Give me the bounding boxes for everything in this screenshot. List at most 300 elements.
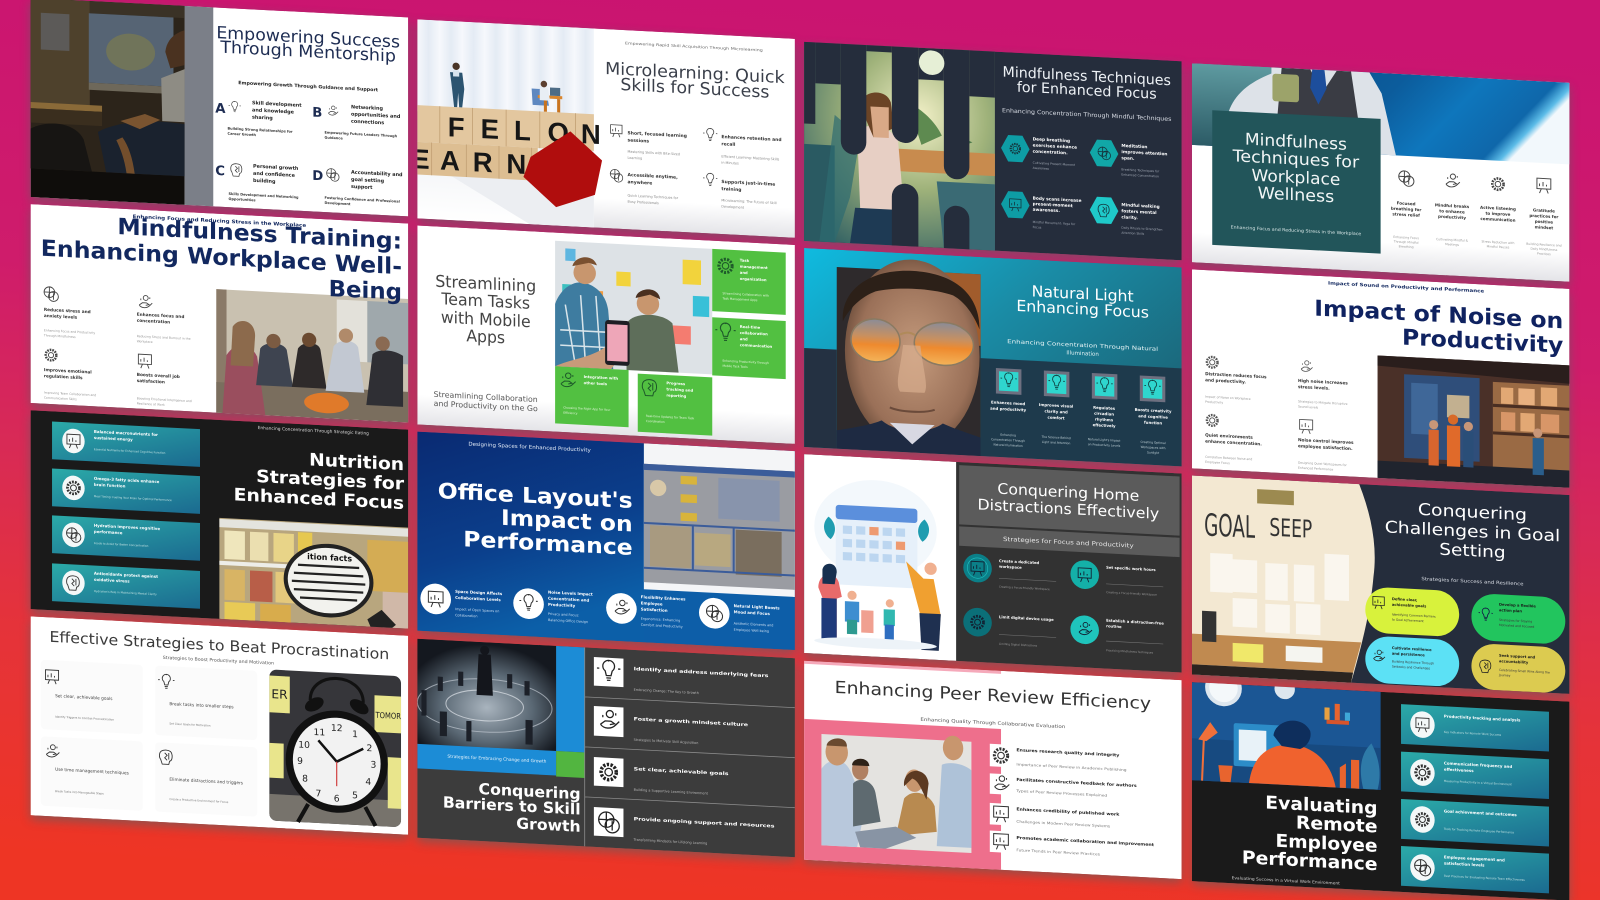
box texts: tracking and (666, 387, 693, 393)
subtitle: and Productivity on the Go (434, 399, 538, 413)
items (1205, 355, 1354, 473)
photo: wooden letter blocks: E (481, 113, 499, 145)
title: Enhanced Focus (234, 485, 404, 514)
metric blocks: Employee engagement and (1444, 854, 1505, 863)
item 4 (1090, 196, 1163, 237)
rows: Promotes academic collaboration and improvement (1016, 835, 1154, 847)
title block: Conquering Home (997, 481, 1139, 505)
four columns: comfort (1048, 415, 1065, 421)
box texts: Choosing the Right App for Your (563, 406, 611, 412)
items: Set clear, achievable goals (55, 693, 113, 702)
kicker: Impact of Sound on Productivity and Performance (1328, 281, 1484, 295)
four pills (1365, 586, 1565, 694)
item 3: Mindful Movement: Yoga for (1033, 220, 1076, 226)
four columns: on Productivity Levels (1088, 442, 1121, 448)
four columns: Concentration Through (991, 437, 1025, 443)
subtitle: Enhancing Concentration Through Mindful Techniques (1002, 108, 1171, 123)
photo: goal whiteboard (1192, 476, 1375, 684)
title (1314, 297, 1563, 359)
four teal blocks: Meal Timing: Fueling Your Brain for Optimal Performance (94, 494, 172, 502)
items: Accessible anytime, (628, 172, 678, 181)
four columns: Natural Illumination (994, 442, 1023, 448)
four columns: communication (1480, 216, 1516, 223)
item D: support (351, 184, 373, 191)
box texts: other tools (584, 381, 608, 386)
title panel: Enhancing Focus and Reducing Stress in the Workplace (1231, 225, 1362, 237)
items: Learning (628, 156, 642, 161)
four columns (1391, 170, 1562, 257)
four pills: achievable goals (1392, 603, 1426, 608)
item D: Accountability and (351, 170, 403, 178)
kicker: Empowering Rapid Skill Acquisition Through Microlearning (625, 41, 763, 52)
four bottom features: Privacy and Focus: (548, 612, 579, 618)
photo: team around laptop (821, 729, 971, 853)
right rows: Provide ongoing support and resources (634, 816, 775, 830)
items: and productivity. (1205, 377, 1246, 385)
title: Productivity (1402, 326, 1563, 359)
illustration: remote worker (1192, 668, 1381, 790)
title: Effective Strategies to Beat Procrastination (49, 629, 389, 663)
four columns: The Science Behind (1041, 435, 1071, 440)
four pills: Setbacks and Challenges (1392, 664, 1431, 670)
item 1: Deep breathing (1033, 136, 1070, 144)
four columns: Meetings (1445, 242, 1459, 247)
title: Being (329, 276, 402, 306)
title: Remote (1296, 812, 1378, 838)
photo: business figures on disc (417, 639, 556, 751)
four teal blocks: Balanced macronutrients for (94, 429, 158, 437)
four bottom features: Comfort and Productivity (641, 623, 683, 629)
four columns: rhythms (1095, 416, 1114, 422)
items: Boosts overall job (137, 372, 180, 380)
items: High noise increases (1298, 378, 1348, 387)
items: Improving Team Collaboration and (44, 391, 96, 397)
title: Office Layout's (438, 479, 633, 514)
item A: Building Strong Relationships for (228, 127, 293, 134)
title: Barriers to Skill (443, 793, 581, 819)
four columns: effectively (1093, 422, 1116, 428)
four bottom features: Balancing Office Design (548, 618, 588, 624)
subtitle: Illumination (1066, 350, 1099, 358)
four pills: and persistence (1392, 652, 1425, 657)
subtitle band: Strategies for Focus and Productivity (1003, 537, 1134, 550)
four columns: Stress Reduction with (1481, 239, 1515, 245)
four columns: Enhancing (1000, 433, 1016, 437)
item A: A (215, 102, 226, 117)
panel: Conquering Home Distractions (804, 454, 1182, 673)
four pills: Motivated and Focused (1499, 623, 1534, 629)
item B: connections (351, 119, 384, 126)
photo: wooden letter blocks: O (547, 116, 569, 148)
photo: alarm clock: 4 (365, 777, 371, 788)
items: Through Mindfulness (43, 333, 76, 339)
four pills: Cultivate resilience (1392, 646, 1432, 652)
item 1: Cultivating Present-Moment (1033, 161, 1076, 167)
panel: Microlearning (411, 19, 795, 238)
photo: alarm clock: 1 (352, 729, 358, 740)
photo: alarm clock: 3 (371, 760, 377, 771)
photo: alarm clock: 5 (352, 790, 358, 802)
photo: team with phone (555, 241, 712, 374)
title: Apps (466, 326, 505, 347)
item 1: Awareness (1033, 166, 1049, 171)
metric blocks: Key Indicators for Remote Work Success (1444, 730, 1502, 737)
items: Mastering Skills with Bite-Sized (628, 150, 680, 156)
photo: wooden letter blocks: R (473, 146, 493, 178)
metric blocks (1401, 704, 1549, 893)
four columns: Creating Optimal (1140, 440, 1166, 445)
item D: Fostering Confidence and Professional (324, 196, 400, 204)
four columns: function (1144, 420, 1162, 426)
four teal blocks: Antioxidants protect against (94, 571, 158, 579)
rows: Ensures research quality and integrity (1016, 747, 1120, 758)
item C: Skills Development and Networking (229, 192, 299, 200)
rows: Types of Peer Review Processes Explained (1015, 789, 1107, 798)
four columns: Cultivating Mindful & (1436, 237, 1469, 243)
item A: sharing (252, 115, 273, 122)
four bottom features: Collaboration Levels (455, 595, 501, 602)
photo: alarm clock: TOMOR (375, 710, 401, 721)
title (1004, 66, 1170, 99)
items: employee satisfaction. (1298, 443, 1353, 452)
metric blocks: Best Practices for Evaluating Remote Team Effectiveness (1444, 874, 1525, 882)
four teal blocks: Essential Nutrients for Enhanced Cognitive Function (94, 447, 166, 455)
title (218, 26, 400, 65)
item B: Empowering Future Leaders Through (324, 131, 398, 138)
rows: Enhances credibility of published work (1016, 806, 1120, 817)
four pills: Identifying Common Barriers (1392, 612, 1436, 619)
items: training (721, 186, 741, 193)
item C: C (215, 164, 225, 179)
four bottom features: Employee (641, 600, 663, 607)
four bottom features: Impact of Open Spaces on (455, 607, 499, 613)
photo: warehouse team (1378, 355, 1569, 488)
four pills: Celebrating Small Wins Along the (1499, 668, 1550, 675)
four pills: Building Resilience Through (1392, 659, 1434, 666)
metric blocks: satisfaction levels (1444, 861, 1485, 868)
title (438, 479, 633, 561)
title (1016, 282, 1149, 322)
four teal blocks: Hydration's Role in Maintaining Mental Clarity (94, 589, 157, 596)
right rows: Transforming Mindsets for Lifelong Learning (633, 838, 707, 846)
photo: nutrition label under magnifier: ition facts (307, 551, 352, 563)
item B: B (312, 106, 322, 121)
four columns: circadian (1094, 411, 1114, 417)
four columns: mindset (1535, 224, 1553, 230)
items: sessions (628, 137, 649, 145)
photo: woman at desk behind pill cutouts (804, 42, 995, 251)
items: Creating a Focus-Friendly Workspace (999, 585, 1050, 591)
rows (990, 744, 1154, 860)
title: Through Mentorship (219, 37, 396, 66)
metric blocks: Productivity tracking and analysis (1444, 714, 1521, 723)
title panel: Wellness (1258, 183, 1334, 206)
four columns (990, 368, 1172, 456)
title: for Enhanced Focus (1017, 80, 1157, 103)
items: Set Clear Goals for Motivation (169, 721, 211, 728)
panel: Natural Light Enhancing Focus (804, 248, 1182, 466)
photo: alarm clock: ER (271, 687, 288, 702)
kicker: Enhancing Concentration Through Strategic Eating (258, 425, 369, 437)
panel: Conquering Barriers to Skill Growth (417, 639, 795, 857)
right rows: Embracing Change: The Key to Growth (634, 688, 699, 695)
item D: Development (324, 201, 351, 206)
items: in Minutes (721, 161, 739, 166)
items: Create a Productive Environment for Focus (169, 797, 229, 804)
four columns: productivity (1438, 214, 1466, 220)
photo: alarm clock: 9 (297, 756, 303, 767)
title (41, 210, 402, 306)
rows: Challenges in Modern Peer Review Systems (1016, 820, 1110, 829)
items: Sound Levels (1298, 405, 1319, 410)
title: Performance (1242, 847, 1378, 875)
items: Limit digital device usage (999, 615, 1054, 622)
item 3: present-moment (1033, 201, 1073, 209)
blue and green blocks (417, 639, 585, 778)
photo: wooden letter blocks: L (514, 115, 531, 147)
subtitle: Evaluating Success in a Virtual Work Environment (1232, 875, 1340, 886)
items: Productivity (1205, 400, 1223, 405)
box texts: and (740, 271, 748, 275)
four teal blocks: brain function (94, 482, 126, 489)
kicker: Enhancing Focus and Reducing Stress in the Workplace (133, 214, 307, 229)
pink panel (804, 719, 1001, 870)
four bottom features: Concentration and (548, 596, 589, 603)
item B: opportunities and (351, 111, 401, 120)
box texts: Coordination (646, 419, 665, 424)
photo: alarm clock: 10 (298, 739, 310, 751)
four columns: Natural Light's Impact (1088, 437, 1121, 443)
item 1 (1001, 135, 1077, 172)
photo: alarm clock: 2 (366, 743, 372, 754)
subtitle (1007, 339, 1159, 361)
kicker: Designing Spaces for Enhanced Productivity (468, 441, 591, 454)
title panel: Techniques for (1232, 146, 1359, 172)
subtitle band (959, 526, 1180, 557)
four columns: Light and Attention (1042, 440, 1070, 445)
photo: alarm clock: 6 (334, 793, 340, 805)
pill cutouts (804, 42, 995, 250)
four columns: practices for (1529, 213, 1558, 219)
items: Enhances focus and (137, 312, 184, 320)
box texts: communication (740, 343, 773, 349)
four bottom features: Aesthetic Elements and (734, 621, 773, 628)
right rows: Building a Supportive Learning Environment (634, 788, 709, 796)
red heptagon (523, 129, 602, 210)
item 3: Focus (1033, 225, 1042, 230)
items (963, 553, 1164, 655)
four bottom features: Ergonomics: Enhancing (641, 617, 680, 623)
title: Empowering Success (216, 22, 400, 52)
four pills: action plan (1499, 608, 1522, 613)
title (606, 62, 784, 98)
photo: goal whiteboard: GOAL (1204, 508, 1255, 546)
four columns: breathing for (1391, 206, 1421, 212)
four columns: Practices (1537, 252, 1551, 256)
item 3: awareness. (1033, 207, 1060, 214)
four columns: Gratitude (1533, 207, 1555, 214)
right rows: Identify and address underlying fears (634, 666, 769, 679)
subtitle: Strategies for Success and Resilience (1421, 576, 1524, 587)
items: Impact of Noise on Workplace (1205, 395, 1251, 401)
item D: D (312, 169, 323, 184)
box texts: Task Management Apps (721, 296, 758, 302)
right rows (585, 647, 795, 857)
items: stress levels. (1298, 384, 1330, 392)
items: Busy Professionals (628, 200, 659, 205)
panel: Office Layout (417, 432, 795, 650)
subtitle: Empowering Growth Through Guidance and Support (238, 80, 379, 93)
items (43, 287, 192, 408)
four columns: Mindful breaks (1435, 202, 1470, 209)
items: Quiet environments (1205, 432, 1253, 441)
four columns: Mindful Pauses (1487, 244, 1510, 250)
items: concentration (137, 318, 170, 326)
item 2: Breathing Techniques for (1121, 167, 1160, 173)
subtitle: Streamlining Collaboration (434, 390, 538, 404)
box texts: and (740, 337, 748, 341)
four columns: to improve (1485, 211, 1511, 217)
items: Noise control improves (1298, 437, 1354, 446)
photo: wooden letter blocks: F (448, 111, 465, 143)
photo: wooden letter blocks: N (581, 118, 601, 150)
title: Enhancing Workplace Well- (41, 236, 402, 280)
box texts: reporting (666, 393, 687, 399)
four columns: Enhancing Focus (1393, 235, 1419, 240)
items: Establish a distraction-free (1106, 619, 1164, 626)
items: routine (1106, 624, 1122, 629)
metric blocks: Goal achievement and outcomes (1444, 808, 1517, 817)
rows: Importance of Peer Review in Academic Publishing (1016, 763, 1127, 772)
four columns: Regulates (1093, 405, 1116, 411)
items: Set specific work hours (1106, 566, 1156, 572)
items: Employee Focus (1205, 460, 1230, 465)
four teal blocks (52, 422, 200, 609)
items: Workplace (137, 339, 153, 344)
subtitle (434, 391, 538, 412)
four bottom features: Satisfaction (641, 606, 668, 613)
panel: Mindfulness Training (31, 204, 408, 423)
four bottom features: Employee Well-being (734, 628, 769, 633)
title: Streamlining (435, 272, 536, 296)
item 3: Body scans increase (1033, 196, 1082, 204)
four bottom features: Natural Light Boosts (734, 603, 780, 611)
four columns: Building Resilience and (1526, 242, 1562, 248)
items: Break tasks into smaller steps (169, 701, 234, 710)
items: Limiting Digital Distractions (999, 642, 1038, 648)
item 2: Enhanced Concentration (1121, 173, 1159, 178)
title: Growth (516, 815, 581, 836)
box texts: Mobile Task Tools (722, 364, 748, 369)
photo: wooden letter blocks: N (506, 148, 526, 180)
metric blocks: effectiveness (1444, 767, 1474, 773)
title (234, 446, 405, 514)
items (610, 123, 782, 212)
four columns: Improves visual (1039, 402, 1073, 409)
items: Correlation Between Noise and (1205, 455, 1252, 461)
title: Challenges in Goal (1385, 517, 1560, 545)
items: Reduces stress and (44, 307, 91, 315)
photo: alarm clock: 11 (314, 727, 325, 739)
items: anywhere (628, 179, 652, 187)
four columns: Focused (1397, 200, 1416, 206)
photo: wooden letter blocks (411, 19, 601, 228)
subtitle: Enhancing Concentration Through Natural (1007, 339, 1159, 353)
items: anxiety levels (44, 313, 78, 321)
title: Natural Light (1032, 282, 1134, 306)
four columns: Breathing (1399, 244, 1414, 249)
item A: Career Growth (228, 132, 257, 137)
box texts: Progress (666, 381, 686, 386)
box texts: management (740, 265, 768, 270)
four teal blocks: performance (94, 529, 123, 535)
four columns: Workspaces with (1141, 445, 1166, 450)
right rows: Foster a growth mindset culture (634, 716, 748, 728)
item D (313, 168, 402, 206)
items: Designing Quiet Workspaces for (1298, 461, 1347, 467)
title: Evaluating (1265, 792, 1378, 819)
items: Short, focused learning (628, 130, 687, 139)
item 2 (1090, 139, 1167, 179)
illustration: family and calendar (814, 477, 941, 652)
items: Efficient Learning: Mastering Skills (721, 154, 780, 161)
title: Nutrition (309, 450, 404, 475)
item D: goal setting (351, 177, 385, 185)
four bottom features: Collaboration (455, 613, 477, 618)
item 4: Mindful walking (1121, 202, 1160, 210)
four teal blocks: Foods to Avoid for Better Concentration (94, 541, 149, 548)
metric blocks: Measuring Productivity in a Virtual Environment (1444, 779, 1513, 786)
panel: Mindfulness Techniques for Workplace Wellness (1192, 63, 1569, 282)
box texts: Task (740, 259, 750, 263)
items: Enhanced Performance (1298, 466, 1333, 472)
four pills: Strategies for Staying (1499, 618, 1532, 624)
four bottom features: Space Design Affects (455, 589, 503, 596)
title: Performance (463, 527, 633, 561)
moon window (919, 50, 944, 76)
four teal blocks: sustained energy (94, 435, 133, 442)
four bottom features (420, 583, 780, 634)
green boxes (555, 241, 786, 439)
grey band (185, 6, 213, 206)
four columns: positive (1535, 219, 1553, 225)
title: Impact of Noise on (1314, 297, 1563, 334)
item C: and confidence (253, 171, 296, 179)
photo: person by window (31, 0, 185, 205)
title (1385, 498, 1560, 565)
title: Strategies for (256, 467, 405, 495)
four pills: accountability (1499, 659, 1529, 665)
items: Reducing Stress and Burnout in the (137, 334, 191, 341)
panel: Empowering Success Through Mentorship (31, 0, 408, 216)
photo: alarm clock: 7 (315, 788, 321, 800)
item B: Networking (351, 104, 383, 112)
photo: goal whiteboard: SEEP (1269, 513, 1312, 544)
item B (313, 104, 400, 140)
title (1242, 791, 1378, 875)
items: Create a dedicated (999, 559, 1040, 565)
photo: alarm clock (269, 669, 401, 827)
rows: Facilitates constructive feedback for authors (1016, 777, 1137, 788)
item A: and knowledge (252, 107, 295, 116)
item C (216, 163, 298, 202)
cards (41, 660, 257, 817)
title: Mindfulness Techniques (1003, 65, 1171, 89)
four columns: Sunlight (1147, 450, 1160, 455)
photo: man with reflective glasses (837, 256, 981, 456)
four bottom features: Productivity (548, 602, 576, 608)
title: Mindfulness Training: (117, 214, 402, 255)
